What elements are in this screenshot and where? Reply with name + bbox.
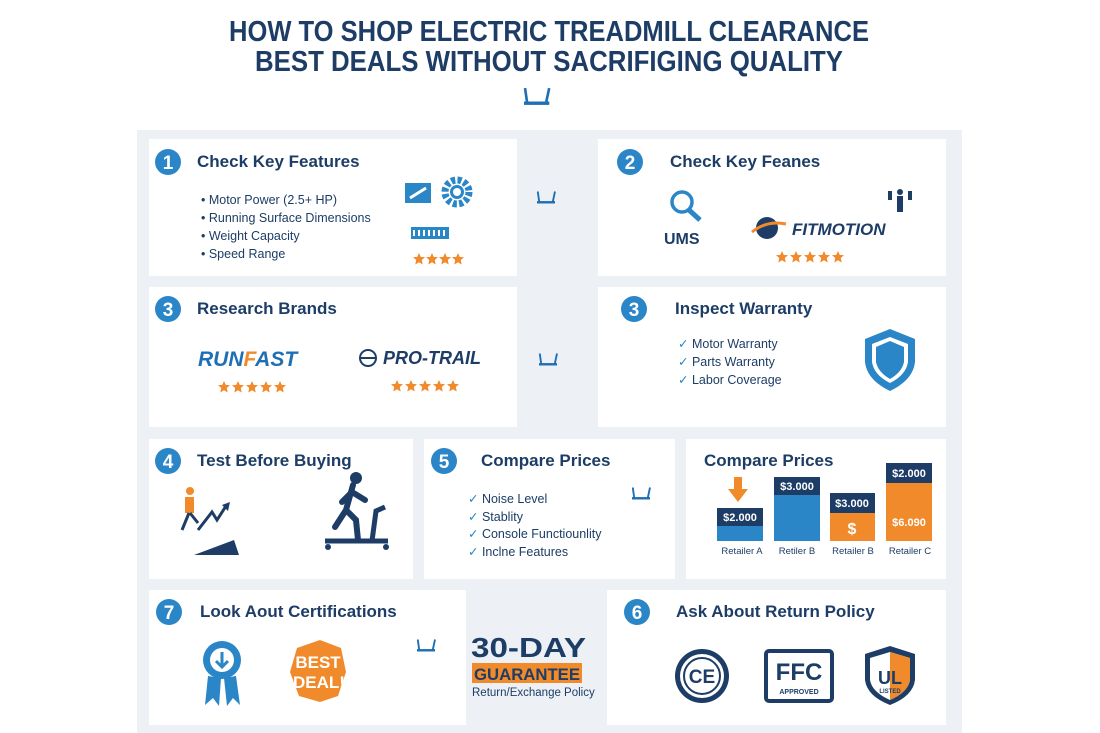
panel: research brands: PRO-TRAIL [383,348,481,368]
panel: check key features 2: 2 [625,153,635,174]
panel: research brands: Research Brands [197,299,337,318]
panel: check key features: 1 [163,153,174,174]
panel: look about certifications: Look Aout Certifications [200,602,397,621]
callout: 30-day guarantee: GUARANTEE [474,665,580,684]
panel: return policy: UL [878,668,902,688]
panel: compare prices bar chart: Compare Prices [704,451,833,470]
callout: 30-day guarantee [471,632,595,699]
title [229,16,869,78]
panel: check key features: • Running Surface Dimensions [201,211,371,225]
panel: compare prices bar chart: Retailer C [889,546,931,557]
panel: compare prices bar chart: Retiler B [779,546,815,557]
panel: check key features 2: FITMOTION [792,220,886,239]
panel: inspect warranty: Inspect Warranty [675,299,813,318]
panel: compare prices checklist: ✓ Stablity [468,510,524,524]
panel: research brands: 3 [163,300,173,321]
title: BEST DEALS WITHOUT SACRIFIGING QUALITY [255,46,843,78]
panel: compare prices bar chart: Retailer B [832,546,874,557]
panel: check key features 2: UMS [664,231,700,248]
icon: treadmill connector 3 [417,640,435,652]
panel: compare prices bar chart: $2.000 [723,512,757,524]
panel: check key features: • Speed Range [201,247,285,261]
callout: 30-day guarantee: Return/Exchange Policy [472,687,595,699]
panel: compare prices checklist: ✓ Inclne Features [468,545,568,559]
panel: compare prices checklist: ✓ Console Functiounlity [468,527,602,541]
panel: compare prices checklist: ✓ Noise Level [468,492,547,506]
panel: check key features: • Motor Power (2.5+ HP) [201,193,337,207]
panel: compare prices bar chart: Retailer A [721,546,763,557]
panel: compare prices bar chart: $3.000 [835,498,869,510]
panel: compare prices bar chart: $2.000 [892,468,926,480]
panel: research brands [149,287,517,427]
icon: treadmill connector 2 [539,354,557,366]
icon: treadmill connector 1 [537,192,555,204]
callout: 30-day guarantee: 30-DAY [471,632,586,663]
panel: compare prices bar chart [686,439,946,579]
panel: look about certifications: 7 [164,603,174,624]
panel: check key features [149,139,517,276]
panel: compare prices bar chart: $6.090 [892,517,926,529]
panel: compare prices checklist: Compare Prices [481,451,610,470]
panel: compare prices bar chart: $3.000 [780,481,814,493]
panel: look about certifications: BEST [295,653,341,672]
panel: look about certifications: DEAL! [293,673,345,692]
panel: compare prices checklist [424,439,675,579]
panel: compare prices bar chart: $ [848,521,857,538]
panel: research brands: RUNFAST [198,348,299,371]
panel: return policy: FFC [776,659,822,686]
panel: check key features: Check Key Features [197,152,360,171]
panel: inspect warranty [598,287,946,427]
panel: test before buying [149,439,413,579]
panel: return policy: LISTED [879,689,901,695]
panel: look about certifications [149,590,466,725]
background container [137,130,962,733]
panel: check key features 2 [598,139,946,276]
panel: test before buying: 4 [163,452,174,473]
title: HOW TO SHOP ELECTRIC TREADMILL CLEARANCE [229,16,869,48]
panel: check key features: • Weight Capacity [201,229,300,243]
panel: inspect warranty: ✓ Labor Coverage [678,373,782,387]
panel: return policy: APPROVED [779,689,819,696]
panel: compare prices checklist: 5 [439,452,450,473]
panel: inspect warranty: ✓ Parts Warranty [678,355,776,369]
panel: return policy [607,590,946,725]
panel: return policy: 6 [632,603,642,624]
panel: inspect warranty: ✓ Motor Warranty [678,337,778,351]
panel: check key features 2: Check Key Feanes [670,152,820,171]
panel: return policy: Ask About Return Policy [676,602,875,621]
panel: test before buying: Test Before Buying [197,451,352,470]
panel: return policy: CE [689,667,715,688]
icon: header treadmill [524,88,549,105]
panel: inspect warranty: 3 [629,300,639,321]
